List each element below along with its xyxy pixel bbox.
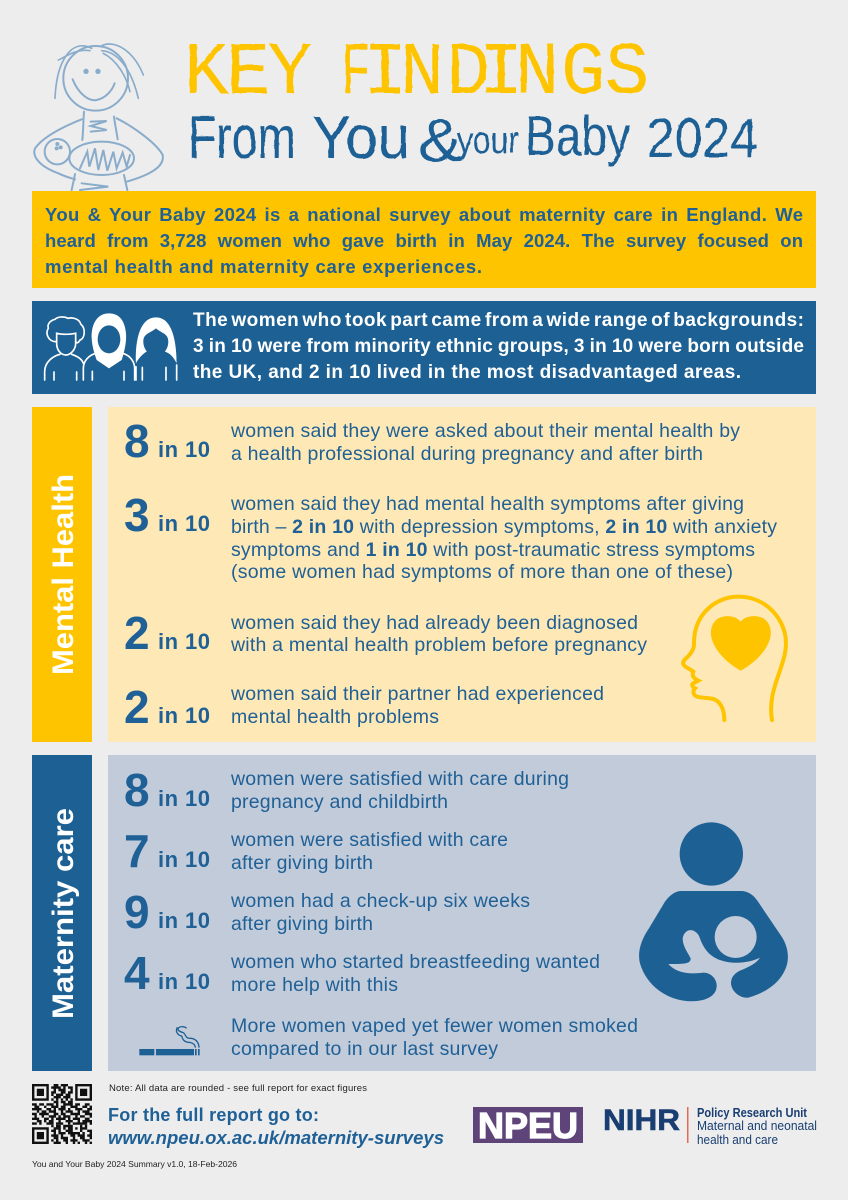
- panel: backgrounds of participants: The women who took part came from a wide range of backgrounds:: [193, 310, 804, 331]
- note: rounding: Note: All data are rounded - see full report for exact figures: [109, 1083, 367, 1094]
- stat: satisfied after birth: in 10: [158, 847, 210, 872]
- subtitle: from you and your baby 2024: You: [312, 104, 410, 171]
- stat: asked about mental health: a health professional during pregnancy and after birth: [231, 443, 703, 465]
- stat: satisfied during pregnancy: women were satisfied with care during: [230, 768, 569, 790]
- panel: backgrounds of participants: 3 in 10 were from minority ethnic groups, 3 in 10 were born outside: [193, 336, 804, 357]
- logo: NIHR policy research unit: health and care: [697, 1133, 778, 1147]
- version note: You and Your Baby 2024 Summary v1.0, 18-Feb-2026: [32, 1159, 237, 1169]
- title: key findings: KEY: [184, 32, 312, 116]
- panel: backgrounds of participants: [32, 301, 816, 394]
- stat: vaping and smoking: More women vaped yet fewer women smoked: [231, 1015, 638, 1037]
- subtitle: from you and your baby 2024: your: [457, 120, 519, 162]
- stat: vaping and smoking: [231, 1015, 638, 1060]
- stat: partner mental health: women said their partner had experienced: [230, 683, 604, 705]
- subtitle: from you and your baby 2024: Baby: [525, 104, 630, 167]
- stat: partner mental health: 2: [124, 681, 150, 733]
- panel: survey introduction: You & Your Baby 2024 is a national survey about maternity care in England. We: [45, 204, 803, 225]
- icon: cigarette: [139, 1027, 200, 1055]
- call to action: full report link: www.npeu.ox.ac.uk/maternity-surveys: [108, 1127, 444, 1148]
- stat: satisfied during pregnancy: 8: [124, 764, 150, 816]
- stat: previously diagnosed: with a mental health problem before pregnancy: [230, 634, 647, 656]
- stat: previously diagnosed: 2: [124, 607, 150, 659]
- panel: survey introduction: heard from 3,728 women who gave birth in May 2024. The survey focused on: [45, 230, 803, 251]
- title: key findings: F: [341, 32, 371, 116]
- subtitle: from you and your baby 2024: [188, 104, 758, 174]
- stat: mental health symptoms: symptoms and 1 in 10 with post-traumatic stress symptoms: [231, 539, 755, 561]
- stat: satisfied during pregnancy: [124, 764, 569, 816]
- icon: three women: [45, 313, 177, 380]
- stat: breastfeeding help: more help with this: [231, 974, 398, 996]
- stat: asked about mental health: [124, 415, 740, 467]
- QR code: [32, 1085, 92, 1143]
- stat: satisfied after birth: after giving birth: [231, 852, 373, 874]
- stat: previously diagnosed: women said they had already been diagnosed: [230, 612, 638, 634]
- illustration: mother holding baby sketch: [34, 44, 163, 190]
- stat: satisfied after birth: 7: [124, 825, 150, 877]
- subtitle: from you and your baby 2024: From: [188, 104, 296, 171]
- stat: mental health symptoms: 3: [124, 489, 150, 541]
- stat: breastfeeding help: [124, 947, 600, 999]
- stat: previously diagnosed: [124, 607, 647, 659]
- stat: six week check-up: in 10: [158, 908, 210, 933]
- logo: NIHR policy research unit: Maternal and neonatal: [697, 1119, 817, 1133]
- stat: six week check-up: women had a check-up six weeks: [230, 890, 530, 912]
- stat: breastfeeding help: women who started breastfeeding wanted: [230, 951, 600, 973]
- stat: mental health symptoms: women said they had mental health symptoms after giving: [230, 493, 744, 515]
- panel: survey introduction: [32, 191, 816, 288]
- stat: mental health symptoms: [124, 489, 777, 583]
- icon: head with heart: [683, 597, 786, 720]
- stat: asked about mental health: women said they were asked about their mental health by: [230, 420, 740, 442]
- stat: partner mental health: in 10: [158, 703, 210, 728]
- call to action: full report link: For the full report go to:: [108, 1105, 319, 1125]
- stat: mental health symptoms: birth – 2 in 10 with depression symptoms, 2 in 10 with anxiety: [231, 516, 777, 538]
- logo: NIHR policy research unit: NIHR: [603, 1104, 680, 1137]
- stat: previously diagnosed: in 10: [158, 629, 210, 654]
- stat: asked about mental health: in 10: [158, 437, 210, 462]
- stat: partner mental health: [124, 681, 604, 733]
- stat: six week check-up: 9: [124, 886, 150, 938]
- panel: maternity care: [32, 755, 816, 1071]
- stat: partner mental health: mental health problems: [231, 706, 439, 728]
- title: key findings: INDINGS: [363, 32, 649, 116]
- stat: mental health symptoms: in 10: [158, 511, 210, 536]
- stat: mental health symptoms: (some women had symptoms of more than one of these): [231, 561, 733, 583]
- stat: satisfied after birth: [124, 825, 508, 877]
- logo: NIHR policy research unit: Policy Research Unit: [697, 1106, 808, 1120]
- stat: six week check-up: after giving birth: [231, 913, 373, 935]
- panel: backgrounds of participants: the UK, and 2 in 10 lived in the most disadvantaged areas.: [193, 362, 741, 383]
- panel: survey introduction: mental health and maternity care experiences.: [45, 256, 482, 277]
- title: key findings: [184, 32, 649, 116]
- stat: satisfied during pregnancy: in 10: [158, 786, 210, 811]
- stat: six week check-up: [124, 886, 530, 938]
- stat: breastfeeding help: in 10: [158, 969, 210, 994]
- subtitle: from you and your baby 2024: 2024: [647, 106, 758, 169]
- logo: NIHR policy research unit: [603, 1104, 817, 1147]
- panel: mental health: [32, 407, 816, 742]
- stat: satisfied during pregnancy: pregnancy and childbirth: [231, 791, 448, 813]
- heading: maternity care: Maternity care: [47, 808, 80, 1019]
- heading: mental health: Mental Health: [47, 474, 80, 675]
- icon: breastfeeding mother: [639, 822, 788, 1001]
- stat: breastfeeding help: 4: [124, 947, 150, 999]
- subtitle: from you and your baby 2024: &: [418, 107, 462, 174]
- stat: asked about mental health: 8: [124, 415, 150, 467]
- logo: NPEU: NPEU: [478, 1105, 578, 1146]
- call to action: full report link: [108, 1105, 444, 1148]
- stat: satisfied after birth: women were satisfied with care: [230, 829, 508, 851]
- stat: vaping and smoking: compared to in our last survey: [231, 1038, 498, 1060]
